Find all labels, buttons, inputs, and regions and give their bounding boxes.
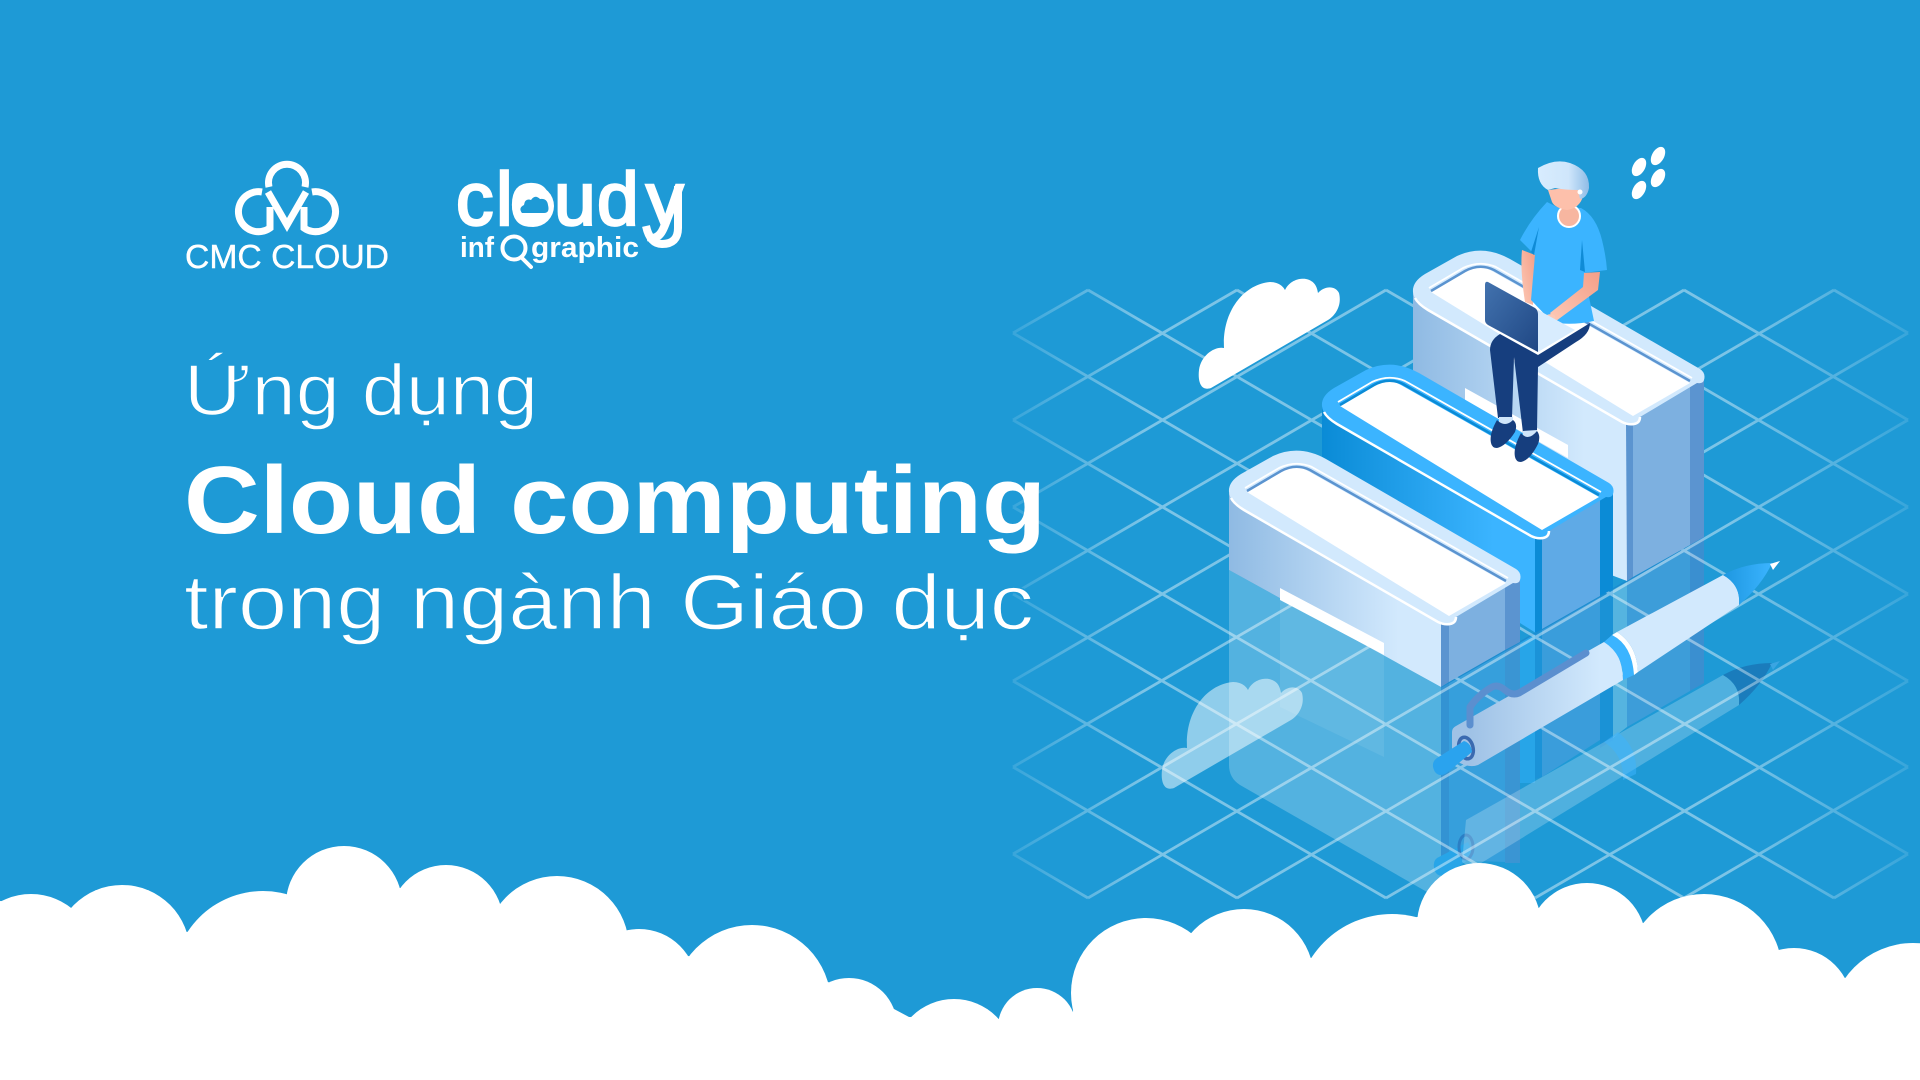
- hand: [1539, 312, 1557, 328]
- pen body front: [1617, 575, 1739, 672]
- illustration: floating cloud: [1199, 279, 1340, 389]
- wordmark: cloudy: cloudy: [456, 157, 684, 241]
- pen band white: [1612, 632, 1638, 675]
- wordmark: graphic: graphic: [531, 232, 639, 264]
- pen clip: [1470, 653, 1586, 725]
- reflections of the books on the floor: [1229, 537, 1704, 900]
- hair: [1538, 161, 1589, 199]
- laptop screen back: [1485, 282, 1538, 352]
- title: first line: Ứng dụng: [184, 351, 538, 431]
- illustration: middle book: [1322, 365, 1614, 633]
- title: last line: trong ngành Giáo dục: [184, 558, 1034, 646]
- illustration: back book: [1413, 251, 1704, 581]
- earring: [1578, 190, 1582, 194]
- title: main line: Cloud computing: [184, 447, 1046, 554]
- face: [1548, 186, 1583, 210]
- shoes: [1491, 420, 1539, 462]
- left arm: [1521, 250, 1535, 305]
- pen plunger: [1433, 741, 1472, 775]
- icon: magnifier letter o: [502, 236, 531, 267]
- laptop base: [1538, 310, 1575, 352]
- legs: [1490, 323, 1590, 433]
- icon: cloud in the letter o: [512, 185, 554, 227]
- icon: small cloud cut-out: [520, 197, 548, 213]
- bottom clouds: [0, 846, 1920, 1080]
- isometric floor grid: [1013, 290, 1908, 898]
- icon: CMC cloud mark: [238, 164, 336, 232]
- wordmark: inf: inf: [460, 232, 494, 264]
- logo: CMC Cloud: [185, 164, 389, 275]
- illustration: front book: [1229, 451, 1520, 687]
- wordmark: CMC CLOUD: CMC CLOUD: [185, 238, 389, 275]
- illustration: pen: [1433, 561, 1780, 775]
- shirt: [1520, 202, 1607, 324]
- pen body rear: [1452, 642, 1623, 766]
- pen ring: [1456, 736, 1476, 760]
- icon: droplets: [1629, 144, 1668, 202]
- reflection of the cloud: [1162, 679, 1303, 789]
- pen tip: [1723, 563, 1772, 605]
- logo: cloudy infographic: [456, 157, 684, 267]
- illustration: person with laptop: [1485, 161, 1607, 462]
- pen nib: [1770, 561, 1780, 570]
- right arm: [1550, 272, 1600, 321]
- pen band: [1604, 635, 1634, 680]
- reflection of the pen: [1434, 661, 1780, 876]
- icon: y tail: [646, 186, 678, 244]
- neck and collar: [1558, 205, 1580, 227]
- socks: [1499, 417, 1537, 439]
- sleeve folds: [1531, 227, 1585, 272]
